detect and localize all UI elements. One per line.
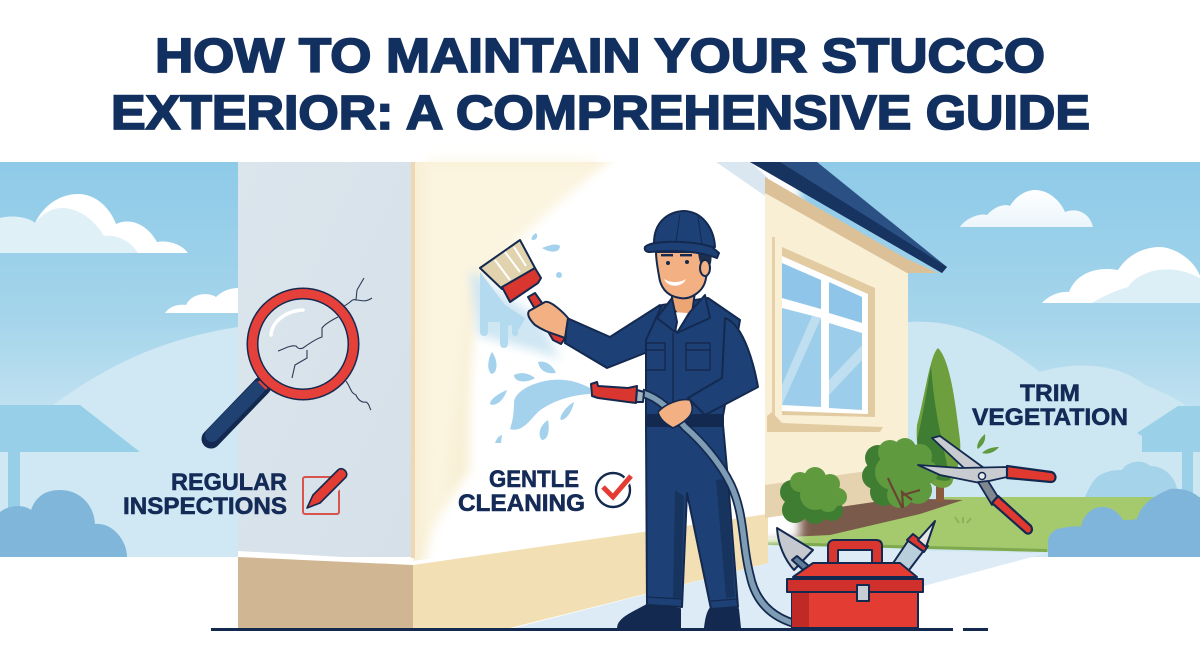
white cleaned patch: [425, 150, 800, 570]
side wall plinth: [765, 468, 908, 518]
magnifier neck: [262, 381, 267, 386]
bush: left: [780, 467, 847, 524]
front wall corner strip: [411, 162, 415, 558]
icon: pen and checkbox: [303, 468, 350, 514]
sky background: [0, 162, 1200, 557]
worker: shirt collar: [672, 312, 688, 331]
toolbox lip: [787, 579, 923, 592]
label: trim vegetation: TRIM: [1020, 380, 1080, 407]
worker: chest pockets and seam: [646, 333, 710, 415]
worker: neck: [672, 292, 695, 316]
magnifier handle: [211, 386, 262, 439]
base ledge: [238, 509, 768, 567]
brush: bristles: [480, 240, 535, 289]
cloud: lower right: [1042, 247, 1200, 303]
label: trim vegetation: VEGETATION: [972, 404, 1128, 431]
roof: [750, 162, 947, 273]
cloud: upper left: [0, 194, 188, 253]
worker: [565, 211, 758, 628]
brush: handle: [528, 293, 566, 344]
worker: ear: [700, 260, 710, 276]
gazebo silhouette: left: [0, 405, 140, 512]
worker: right sleeve: [688, 318, 758, 415]
ground line: [211, 628, 988, 631]
worker: trouser cuffs: [647, 597, 737, 601]
title line 2: EXTERIOR: A COMPREHENSIVE GUIDE: [111, 87, 1090, 140]
shears: pivot: [978, 472, 986, 480]
water drips under brush: [470, 270, 560, 360]
window: [767, 237, 883, 432]
trowel: [777, 528, 813, 570]
toolbox handle: [828, 540, 882, 563]
shears: blades: [932, 436, 984, 468]
worker: belt: [646, 415, 723, 426]
base left: [238, 557, 413, 628]
bush silhouette: front right: [1048, 489, 1200, 557]
toolbox latch: [857, 585, 869, 601]
label: gentle cleaning: GENTLE: [489, 466, 579, 493]
title: [111, 30, 1090, 140]
label: trim vegetation: [972, 380, 1128, 431]
leaves: [977, 434, 999, 454]
house: [238, 150, 947, 628]
roof eave shadow: [750, 162, 947, 273]
toolbox body: [792, 590, 918, 628]
toolbox with trowel and caulk: [777, 521, 935, 628]
lens highlight: [271, 310, 303, 335]
paint brush: [480, 240, 568, 344]
bush: right: [862, 438, 938, 508]
label: gentle cleaning: CLEANING: [458, 490, 585, 517]
magnifier ring: [252, 294, 354, 394]
hose nozzle: [591, 382, 644, 403]
corner glow on front wall: [425, 162, 600, 540]
lawn and ground: [510, 497, 1200, 629]
worker: hand on hose: [658, 400, 692, 428]
label: regular inspections: REGULAR: [171, 469, 287, 496]
gazebo silhouette: right: [1137, 406, 1200, 497]
crack lines: [278, 278, 372, 410]
side wall: [765, 177, 908, 512]
shears: red handles: [1007, 466, 1056, 482]
brush: ferrule: [502, 268, 541, 302]
soffit: [765, 177, 938, 273]
worker: eyes and smile: [661, 254, 692, 286]
label: regular inspections: [123, 469, 287, 520]
base right: [413, 514, 768, 628]
magnifying glass: [211, 278, 372, 439]
trimmed tree: [917, 348, 960, 502]
worker: lapels: [657, 295, 710, 333]
water splash: [488, 233, 590, 443]
worker: boots: [618, 605, 740, 628]
gable corner: [716, 162, 768, 198]
worker: hair: [698, 250, 711, 273]
caulk tube: [883, 538, 925, 578]
brush: hand: [528, 302, 568, 338]
worker: face: [656, 252, 711, 298]
title line 1: HOW TO MAINTAIN YOUR STUCCO: [155, 30, 1045, 83]
worker: trouser shading: [673, 478, 735, 598]
front wall: [413, 162, 770, 566]
label: regular inspections: INSPECTIONS: [123, 493, 287, 520]
toolbox lid: [793, 563, 917, 577]
worker: torso: [646, 298, 740, 416]
brush: bristle strands: [495, 247, 526, 280]
bush silhouette: back right: [1085, 462, 1178, 497]
bush silhouette: left: [0, 490, 127, 557]
worker: raised arm: [565, 305, 668, 368]
left wall: [238, 162, 413, 557]
hose: [642, 393, 800, 625]
icon: check mark: [596, 473, 631, 507]
worker: hard hat: [654, 211, 715, 247]
worker: legs: [646, 425, 738, 609]
garden shears: [918, 436, 1056, 534]
cloud: small left: [165, 288, 238, 313]
cloud: upper right: [960, 190, 1093, 227]
label: gentle cleaning: [458, 466, 585, 517]
